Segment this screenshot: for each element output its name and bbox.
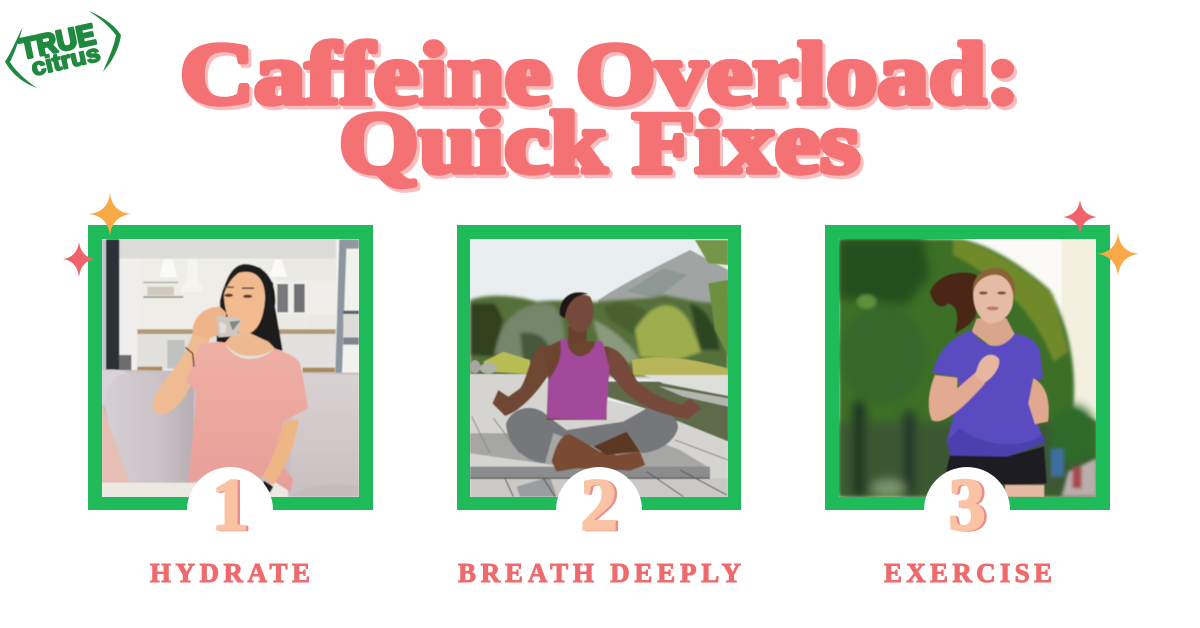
panel: hydrate: [63, 193, 373, 588]
title text: [180, 26, 1020, 192]
number badge 1: 1: [212, 464, 248, 546]
torso: [543, 340, 610, 420]
shorts: [946, 447, 1047, 485]
title text: Caffeine Overload:: [180, 26, 1020, 123]
bracelet: [185, 347, 194, 367]
number badge 2: 2: [580, 464, 618, 546]
logo: True Citrus: [5, 11, 121, 88]
photo: woman meditating on a deck: [470, 239, 728, 497]
title shadow: [183, 30, 1023, 196]
number badge 3: [924, 464, 1010, 553]
legs: [506, 408, 678, 463]
number badge 2: [556, 464, 642, 553]
photo: woman drinking water on a sofa: [101, 239, 359, 498]
number badge 2: 2: [583, 465, 620, 547]
arm up: [153, 333, 212, 414]
frame: [825, 225, 1110, 510]
water and deck edge: [607, 382, 728, 442]
hair: [217, 264, 283, 351]
sofa: [101, 370, 359, 497]
frame: [457, 225, 741, 510]
number badge 3: 3: [951, 465, 988, 547]
icon: red sparkle: [1063, 200, 1097, 234]
title: [180, 26, 1023, 196]
label: hydrate: HYDRATE: [150, 558, 310, 588]
label: exercise: EXERCISE: [884, 558, 1052, 588]
icon: orange sparkle: [1097, 233, 1139, 276]
hand and glass: [193, 307, 227, 339]
right arm and hands: [1028, 378, 1049, 424]
panel: exercise: [825, 200, 1139, 588]
icon: red sparkle: [63, 242, 95, 277]
shirt: [186, 342, 308, 492]
head: [568, 327, 587, 343]
number badge 1: [187, 464, 273, 553]
logo: True Citrus: citrus: [29, 40, 103, 82]
logo: True Citrus: TRUE: [17, 18, 98, 66]
title text: Quick Fixes: [339, 95, 860, 192]
head and neck: [971, 318, 1015, 347]
hair: [930, 272, 980, 333]
number badge 1: 1: [214, 465, 251, 547]
photo: woman jogging outdoors: [839, 239, 1097, 497]
title shadow: Caffeine Overload:: [183, 30, 1023, 126]
number badge 3: 3: [948, 464, 986, 546]
shirt: [933, 330, 1045, 458]
lower arm: [262, 419, 298, 485]
label: breath deeply: BREATH DEEPLY: [458, 558, 741, 588]
arm: [929, 372, 985, 421]
arms: [492, 345, 555, 416]
panel: breath deeply: [457, 225, 741, 588]
frame: [88, 225, 373, 510]
head: [224, 272, 265, 335]
icon: orange sparkle: [89, 193, 131, 236]
title shadow: Quick Fixes: [342, 98, 863, 196]
